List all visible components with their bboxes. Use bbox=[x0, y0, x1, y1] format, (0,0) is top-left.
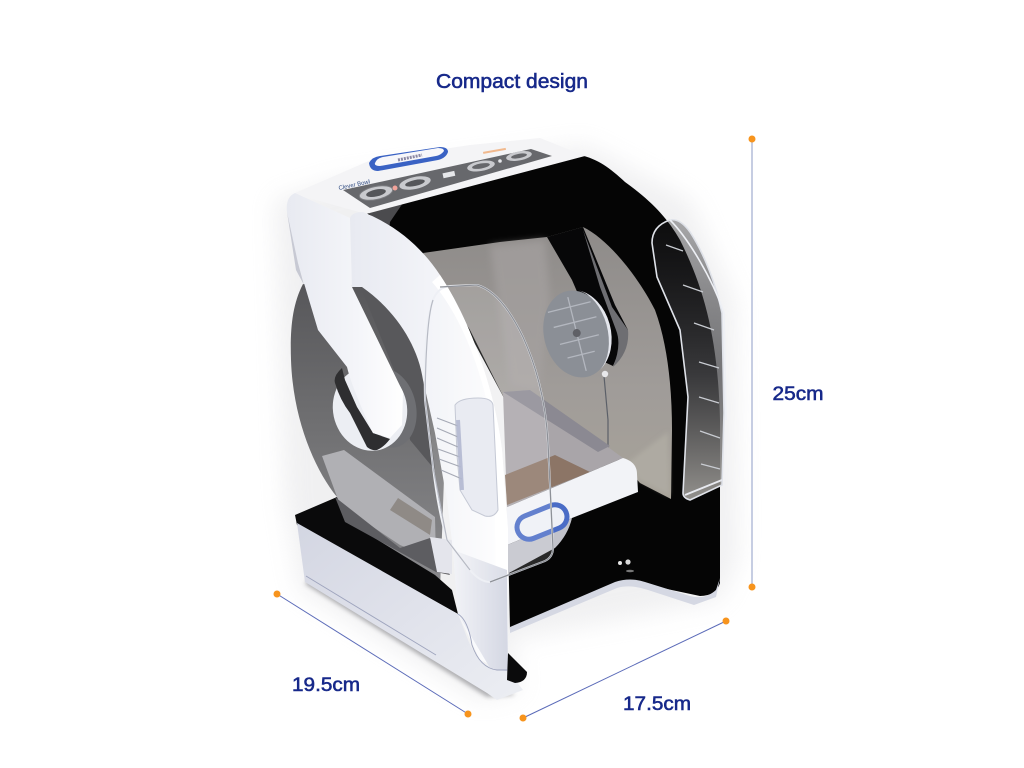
product illustration: pet feeder device bbox=[287, 138, 726, 700]
front foot bbox=[507, 653, 527, 683]
left food tray bbox=[322, 450, 452, 575]
rear wire bbox=[600, 376, 608, 468]
white bottom rim bbox=[510, 578, 720, 633]
front arch arm bbox=[350, 212, 508, 672]
orange accent label bbox=[483, 148, 506, 154]
control panel dark strip bbox=[343, 149, 552, 208]
base top black bbox=[295, 497, 458, 614]
base front side bbox=[297, 523, 523, 700]
rear support arm bbox=[547, 227, 628, 367]
width label: 17.5cm bbox=[623, 694, 691, 715]
left arm upper shade bbox=[287, 212, 304, 285]
brand label on lid: Clever Bowl bbox=[338, 179, 371, 192]
interior window bbox=[423, 227, 672, 499]
flap grip bbox=[455, 398, 498, 516]
dark grey corner below panel bbox=[365, 200, 424, 255]
height label: 25cm bbox=[772, 384, 824, 405]
contact shadow under base bbox=[305, 574, 515, 697]
left arch opening bbox=[360, 285, 435, 470]
blue lid handle bbox=[369, 147, 448, 171]
left knob hub and disc bbox=[325, 360, 424, 458]
blue tray handle bbox=[513, 501, 571, 543]
soft shadow around product bbox=[275, 145, 738, 700]
light wall patch bbox=[490, 240, 550, 390]
right clear flap bbox=[652, 220, 726, 500]
left arm bbox=[287, 193, 403, 438]
front pillar bbox=[453, 550, 508, 672]
depth label: 19.5cm bbox=[292, 675, 360, 696]
left rear smoked disc bbox=[291, 284, 445, 590]
width dimension line bbox=[520, 618, 730, 722]
base seam line bbox=[306, 576, 507, 670]
title: Compact design bbox=[436, 71, 588, 93]
height dimension line bbox=[748, 136, 756, 590]
rear fan disc bbox=[534, 283, 621, 385]
floor gloss highlights bbox=[618, 559, 634, 572]
front clear flap bbox=[425, 285, 553, 582]
depth dimension line bbox=[274, 590, 472, 718]
rear tray bbox=[503, 390, 638, 574]
top control surface bbox=[295, 138, 585, 214]
arch highlight face bbox=[432, 275, 508, 600]
rear arch black shell bbox=[365, 155, 720, 630]
